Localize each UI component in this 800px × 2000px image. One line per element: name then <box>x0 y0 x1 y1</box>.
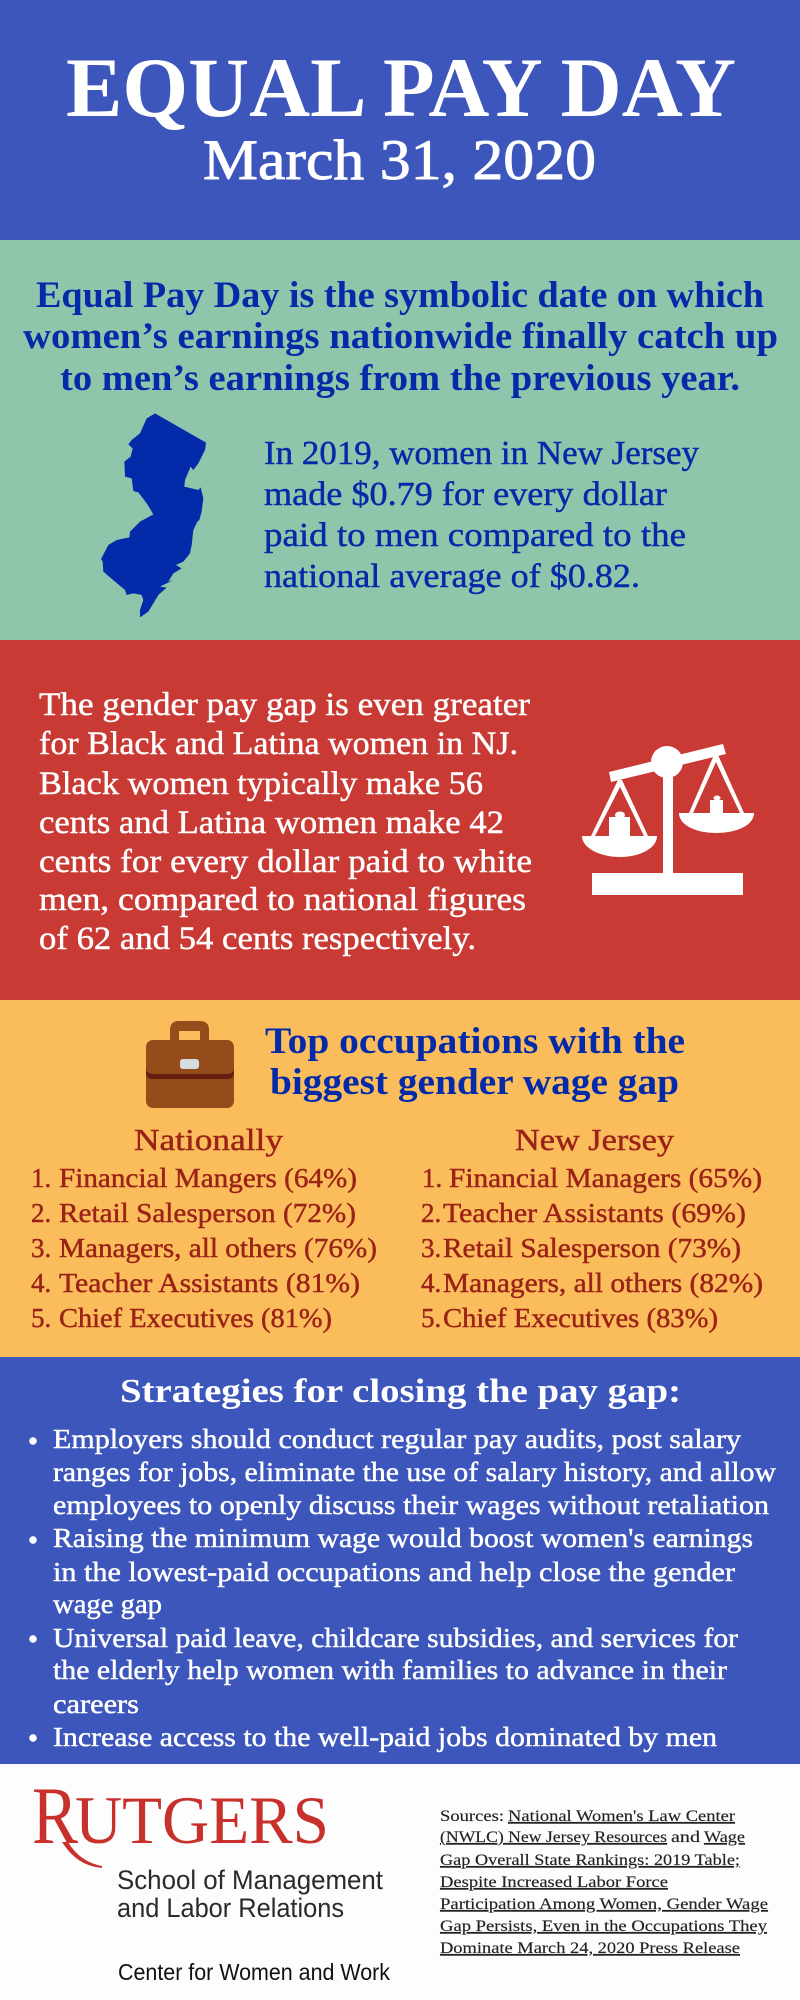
New Jersey list: Financial Managers (65%) <box>449 1163 762 1193</box>
definition heading: to men’s earnings from the previous year. <box>60 358 740 399</box>
sources: (NWLC) New Jersey Resources <box>440 1829 667 1846</box>
panel: definition and New Jersey <box>0 240 800 640</box>
New Jersey statistic text: paid to men compared to the <box>264 517 686 554</box>
national list: Chief Executives (81%) <box>59 1303 332 1333</box>
occupations heading <box>265 1021 685 1103</box>
strategies bullet list: wage gap <box>53 1589 162 1619</box>
national list: Retail Salesperson (72%) <box>59 1198 356 1228</box>
title: EQUAL PAY DAY <box>66 41 736 135</box>
pay gap text <box>39 687 532 957</box>
Rutgers wordmark: R <box>32 1770 78 1861</box>
sources: Wage <box>704 1829 745 1846</box>
New Jersey list: 2. <box>421 1198 441 1228</box>
pay gap text: for Black and Latina women in NJ. <box>39 726 518 762</box>
New Jersey statistic text: In 2019, women in New Jersey <box>264 435 699 472</box>
school name <box>117 1865 383 1923</box>
strategies bullet list: careers <box>53 1689 139 1719</box>
New Jersey list: Managers, all others (82%) <box>443 1268 763 1298</box>
Rutgers logo <box>32 1770 390 1985</box>
sources: Gap Persists, Even in the Occupations They <box>440 1918 767 1935</box>
New Jersey statistic text <box>264 435 699 595</box>
sources: Participation Among Women, Gender Wage <box>440 1896 768 1913</box>
national list: 5. <box>31 1303 51 1333</box>
definition heading: Equal Pay Day is the symbolic date on which <box>36 275 764 316</box>
definition heading <box>23 275 778 399</box>
strategies bullet list: ranges for jobs, eliminate the use of salary history, and allow <box>53 1457 777 1487</box>
strategies bullet list: in the lowest-paid occupations and help close the gender <box>53 1557 735 1587</box>
Rutgers wordmark: UTGERS <box>75 1782 329 1858</box>
pay gap text: cents and Latina women make 42 <box>39 805 504 841</box>
school name: School of Management <box>117 1865 383 1895</box>
national list: 2. <box>31 1198 51 1228</box>
panel: strategies <box>0 1357 800 1764</box>
sources: Despite Increased Labor Force <box>440 1874 668 1891</box>
New Jersey list: Chief Executives (83%) <box>443 1303 718 1333</box>
strategies bullet list: the elderly help women with families to advance in their <box>53 1655 727 1685</box>
national list: 4. <box>31 1268 51 1298</box>
pay gap text: of 62 and 54 cents respectively. <box>39 921 476 957</box>
panel: title banner <box>0 0 800 240</box>
sources: Sources: <box>440 1808 504 1825</box>
strategies bullet list: Increase access to the well-paid jobs dominated by men <box>53 1722 718 1752</box>
definition heading: women’s earnings nationwide finally catch up <box>23 316 778 357</box>
sources: National Women's Law Center <box>508 1808 736 1825</box>
New Jersey statistic text: national average of $0.82. <box>264 558 640 595</box>
pay gap text: men, compared to national figures <box>39 882 526 918</box>
sources: Dominate March 24, 2020 Press Release <box>440 1940 740 1957</box>
national list: 1. <box>31 1163 51 1193</box>
panel: top occupations <box>0 1000 800 1357</box>
center name: Center for Women and Work <box>118 1959 390 1985</box>
pay gap text: cents for every dollar paid to white <box>39 844 532 880</box>
national list: Financial Mangers (64%) <box>59 1163 357 1193</box>
pay gap text: Black women typically make 56 <box>39 766 483 802</box>
school name: and Labor Relations <box>117 1893 344 1923</box>
icon: balance scale <box>582 744 754 895</box>
New Jersey statistic text: made $0.79 for every dollar <box>264 476 668 513</box>
occupations heading: Top occupations with the <box>265 1021 685 1062</box>
occupations heading: biggest gender wage gap <box>270 1062 679 1103</box>
national column heading: Nationally <box>134 1122 284 1157</box>
icon: briefcase <box>146 1021 234 1108</box>
pay gap text: The gender pay gap is even greater <box>39 687 530 723</box>
New Jersey list <box>421 1122 763 1333</box>
date subtitle: March 31, 2020 <box>203 129 596 192</box>
strategies bullet list: Employers should conduct regular pay audits, post salary <box>53 1424 742 1454</box>
strategies heading: Strategies for closing the pay gap: <box>120 1373 681 1410</box>
national list: Managers, all others (76%) <box>59 1233 377 1263</box>
strategies bullet list <box>29 1424 777 1752</box>
sources: and <box>671 1829 700 1846</box>
panel: Black and Latina pay gap <box>0 640 800 1000</box>
sources: Gap Overall State Rankings: 2019 Table; <box>440 1852 740 1869</box>
New Jersey list: Retail Salesperson (73%) <box>443 1233 741 1263</box>
national list: 3. <box>31 1233 51 1263</box>
New Jersey list: 5. <box>421 1303 441 1333</box>
New Jersey list: 4. <box>421 1268 441 1298</box>
New Jersey list: 3. <box>421 1233 441 1263</box>
strategies bullet list: Raising the minimum wage would boost women's earnings <box>53 1523 753 1553</box>
strategies bullet list: employees to openly discuss their wages without retaliation <box>53 1490 770 1520</box>
national list: Teacher Assistants (81%) <box>59 1268 360 1298</box>
sources <box>440 1808 768 1957</box>
icon: New Jersey map <box>101 413 206 617</box>
Rutgers wordmark <box>32 1770 329 1868</box>
New Jersey list: Teacher Assistants (69%) <box>443 1198 746 1228</box>
national list <box>31 1122 377 1333</box>
panel: footer <box>0 1764 800 2000</box>
New Jersey list: 1. <box>422 1163 442 1193</box>
New Jersey column heading: New Jersey <box>515 1122 675 1157</box>
strategies bullet list: Universal paid leave, childcare subsidies, and services for <box>53 1623 738 1653</box>
